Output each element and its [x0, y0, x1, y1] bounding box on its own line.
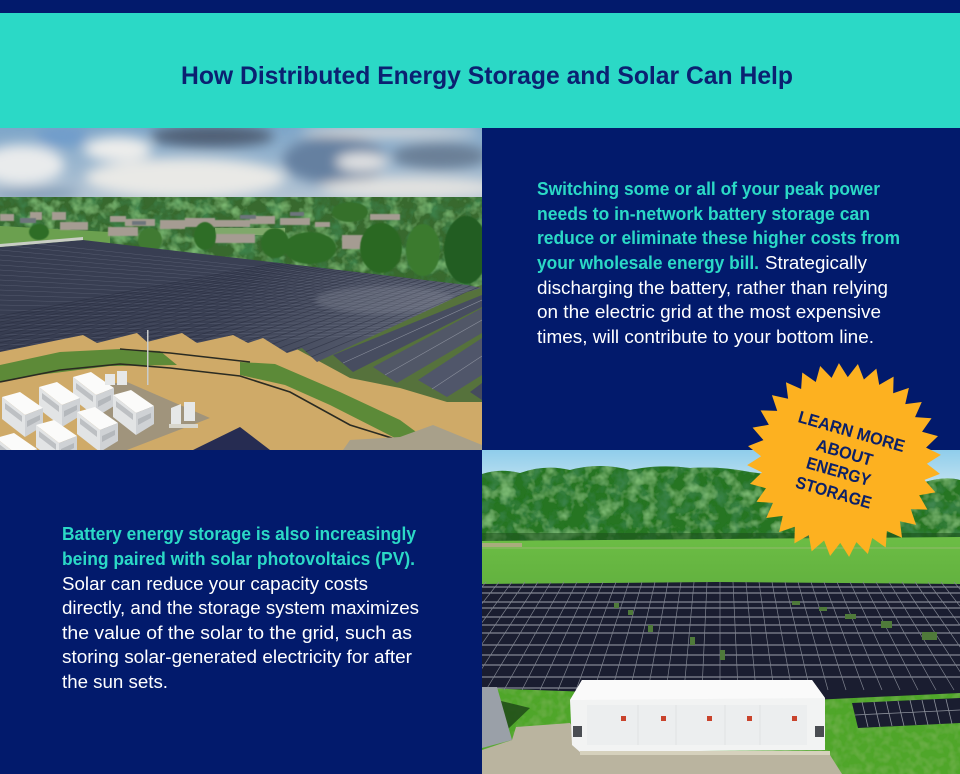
text block: solar pairing: the sun sets.	[62, 672, 168, 692]
small solar array	[193, 427, 270, 450]
solar array main field	[0, 237, 482, 362]
solar array	[482, 582, 960, 700]
houses	[0, 212, 400, 249]
gravel pad	[100, 382, 210, 450]
green berm and silt fence	[0, 349, 482, 450]
text block: peak power: your wholesale energy bill.	[537, 253, 759, 273]
understory shadow	[482, 533, 960, 541]
battery containers	[0, 372, 154, 450]
text block: solar pairing: directly, and the storage system maximizes	[62, 598, 419, 618]
title banner	[0, 13, 960, 128]
text block: peak power: times, will contribute to your bottom line.	[537, 327, 874, 347]
text block: peak power: discharging the battery, rather than relying	[537, 278, 888, 298]
small solar row	[852, 698, 960, 728]
grass under the right rows	[280, 285, 482, 402]
grey shed	[482, 687, 530, 748]
text block: peak power: needs to in-network battery storage can	[537, 204, 870, 224]
text block: solar pairing: being paired with solar photovoltaics (PV).	[62, 549, 415, 569]
callout text: ENERGY	[804, 453, 873, 490]
ground: sand	[0, 333, 482, 450]
text block: peak power: reduce or eliminate these higher costs from	[537, 228, 900, 248]
solar array rows on the right	[333, 295, 482, 400]
callout: learn more starburst	[742, 358, 946, 562]
text block: peak power: on the electric grid at the most expensive	[537, 302, 881, 322]
panel: photo of solar array with battery unit	[360, 450, 960, 774]
panel: photo of solar field with battery containers	[0, 128, 482, 450]
green field	[482, 537, 960, 584]
small inverters	[105, 371, 198, 428]
sky	[482, 450, 960, 482]
callout text: LEARN MORE	[796, 407, 907, 456]
text block: peak power	[537, 179, 900, 347]
text block: solar pairing	[62, 524, 419, 692]
foreground trees	[29, 202, 488, 284]
callout text: STORAGE	[793, 473, 874, 513]
sky with clouds	[0, 128, 482, 197]
callout text: ABOUT	[814, 436, 876, 470]
gravel	[482, 723, 842, 774]
text block: solar pairing: storing solar-generated electricity for after	[62, 647, 412, 667]
tree line	[482, 466, 960, 541]
battery unit	[570, 680, 830, 755]
text block: solar pairing: the value of the solar to the grid, such as	[62, 623, 412, 643]
light pole	[147, 330, 148, 385]
text block: solar pairing: Battery energy storage is also increasingly	[62, 524, 416, 544]
text block: peak power: Switching some or all of your peak power	[537, 179, 880, 199]
ground below array	[482, 684, 960, 774]
callout text	[793, 407, 907, 513]
background trees	[0, 197, 482, 287]
title: How Distributed Energy Storage and Solar Can Help	[181, 62, 793, 90]
text block: solar pairing: Solar can reduce your capacity costs	[62, 574, 368, 594]
text block: peak power: Strategically	[765, 253, 867, 273]
